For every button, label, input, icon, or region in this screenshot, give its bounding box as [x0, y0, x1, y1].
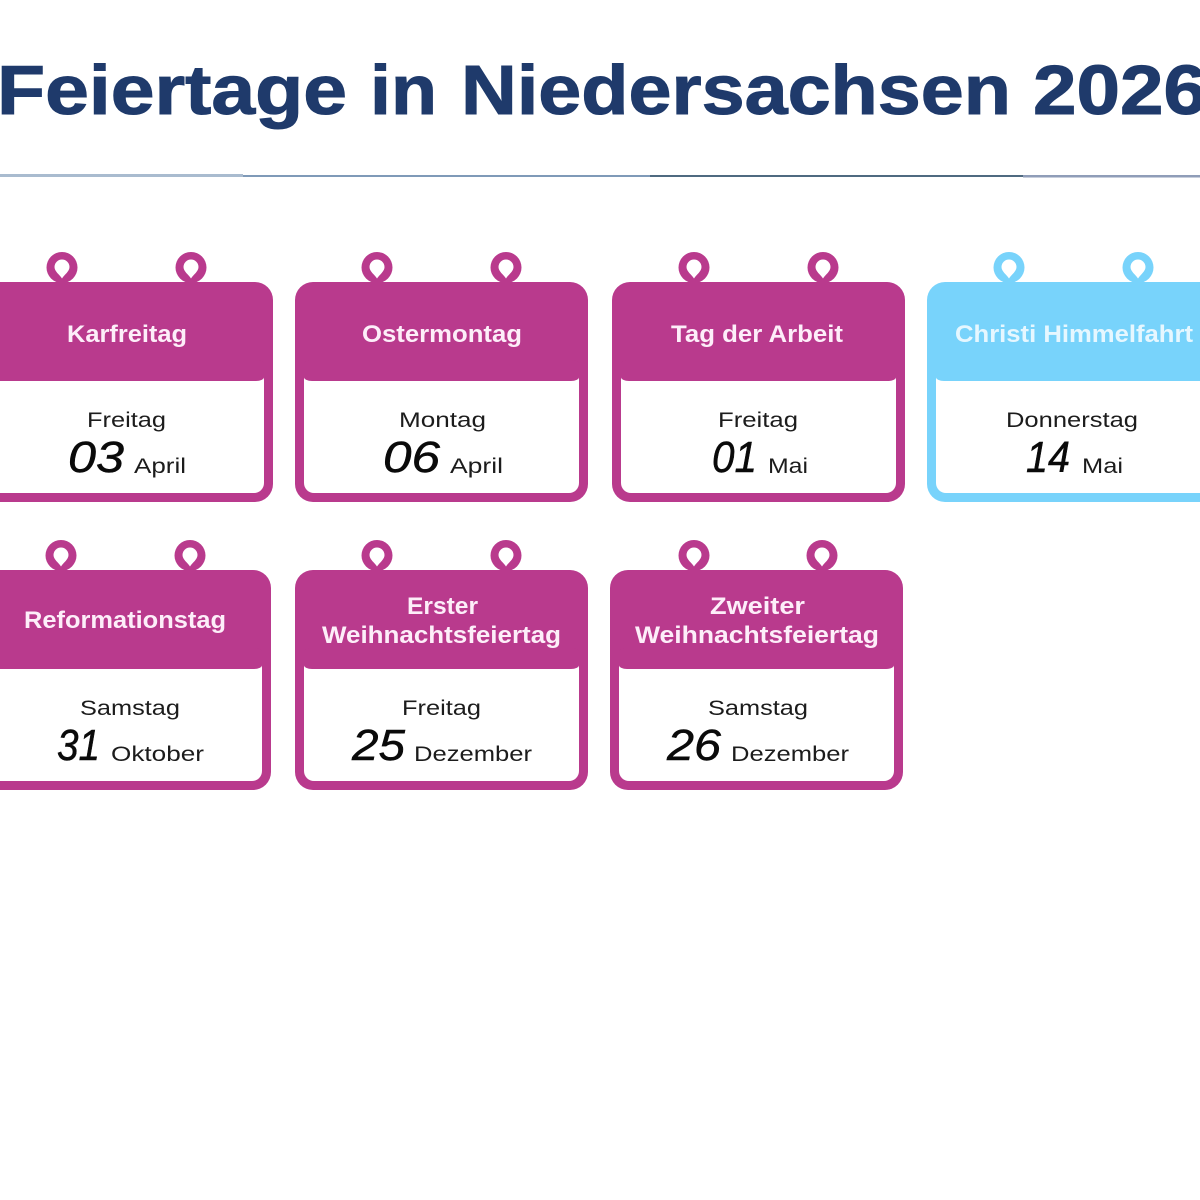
holiday name: Christi Himmelfahrt [955, 321, 1193, 348]
holiday name: Reformationstag [24, 607, 226, 634]
weekday: Samstag [708, 697, 808, 720]
month: April [134, 455, 186, 478]
calendar shape [927, 252, 1200, 502]
day number: 25 [351, 721, 406, 770]
day number: 14 [1026, 433, 1070, 482]
weekday: Freitag [87, 409, 166, 432]
weekday: Freitag [402, 697, 481, 720]
panel: Ostermontag [295, 252, 588, 502]
holiday name [635, 593, 879, 649]
holiday name: Tag der Arbeit [671, 321, 843, 348]
weekday: Freitag [718, 409, 798, 432]
panel: Erster Weihnachtsfeiertag [295, 540, 588, 790]
day number: 06 [383, 433, 441, 482]
panel: Karfreitag [0, 252, 273, 502]
title: 2026 [1033, 51, 1200, 129]
month: Mai [1082, 455, 1123, 478]
divider rule [0, 174, 1200, 178]
panel: Tag der Arbeit [612, 252, 905, 502]
holiday name: Ostermontag [362, 321, 522, 348]
weekday: Montag [399, 409, 486, 432]
holiday name: Weihnachtsfeiertag [635, 622, 879, 649]
holiday name: Zweiter [710, 593, 805, 620]
day number: 03 [68, 433, 125, 482]
calendar shape [612, 252, 905, 502]
day number: 01 [712, 433, 757, 482]
holiday name [322, 593, 561, 649]
panel: Christi Himmelfahrt [927, 252, 1200, 502]
weekday: Samstag [80, 697, 180, 720]
calendar shape [295, 540, 588, 790]
title: in [370, 51, 437, 129]
holiday name: Karfreitag [67, 321, 187, 348]
calendar shape [0, 252, 273, 502]
holiday name: Erster [407, 593, 478, 620]
title: Feiertage [0, 51, 347, 129]
day number: 31 [57, 721, 100, 770]
day number: 26 [666, 721, 722, 770]
month: Dezember [731, 743, 849, 766]
panel: Zweiter Weihnachtsfeiertag [610, 540, 903, 790]
weekday: Donnerstag [1006, 409, 1138, 432]
month: Oktober [111, 743, 204, 766]
holiday name: Weihnachtsfeiertag [322, 622, 561, 649]
month: Mai [768, 455, 808, 478]
panel: Reformationstag [0, 540, 271, 790]
title: Niedersachsen [461, 51, 1011, 129]
month: April [450, 455, 503, 478]
calendar shape [610, 540, 903, 790]
calendar shape [0, 540, 271, 790]
calendar shape [295, 252, 588, 502]
month: Dezember [414, 743, 532, 766]
